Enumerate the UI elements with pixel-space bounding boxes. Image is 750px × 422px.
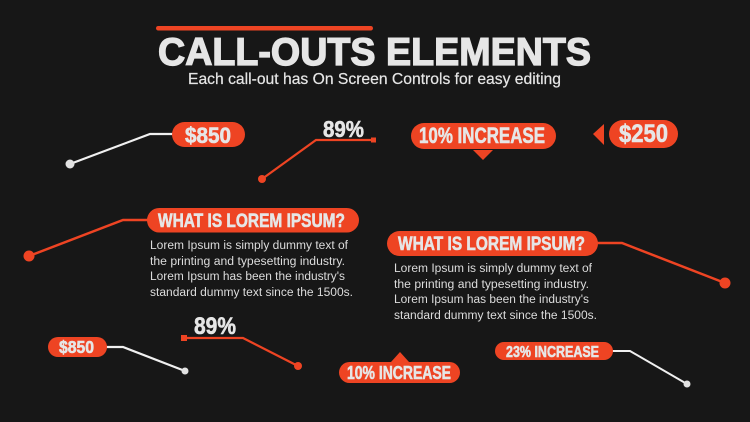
callout: $250 (593, 120, 678, 148)
callout: 23% increase: 23% INCREASE (506, 344, 599, 361)
panel: lorem ipsum left: Lorem Ipsum has been the industry's (150, 271, 345, 283)
panel: lorem ipsum right: standard dummy text since the 1500s. (394, 310, 597, 322)
panel: lorem ipsum right: Lorem Ipsum is simply dummy text of (394, 263, 593, 275)
callout: 89% top: 89% (323, 116, 364, 142)
panel: lorem ipsum right: Lorem Ipsum has been the industry's (394, 294, 589, 306)
callout: 89% bottom (181, 313, 302, 370)
panel: lorem ipsum right: WHAT IS LOREM IPSUM? (398, 234, 585, 255)
panel: lorem ipsum right (387, 231, 730, 322)
callout: 10% increase bottom: 10% INCREASE (347, 363, 451, 383)
panel: lorem ipsum left: WHAT IS LOREM IPSUM? (158, 211, 345, 232)
panel: lorem ipsum left: standard dummy text since the 1500s. (150, 287, 353, 299)
panel: lorem ipsum right: the printing and typesetting industry. (394, 279, 589, 291)
title: CALL-OUTS ELEMENTS (158, 31, 591, 74)
subtitle: Each call-out has On Screen Controls for easy editing (188, 71, 561, 88)
panel: lorem ipsum left: Lorem Ipsum is simply dummy text of (150, 240, 349, 252)
callout: $850 top (66, 122, 245, 168)
panel: lorem ipsum left (24, 208, 359, 299)
panel: lorem ipsum left: the printing and typesetting industry. (150, 256, 345, 268)
callout: 10% increase bottom (339, 352, 460, 383)
callout: $850 top: $850 (185, 123, 231, 148)
callout: 10% increase top (411, 123, 556, 160)
callout: $850 bottom: $850 (59, 337, 94, 357)
callout: 23% increase (495, 342, 690, 388)
callout: 89% bottom: 89% (194, 313, 236, 340)
callout: 10% increase top: 10% INCREASE (419, 123, 545, 148)
title accent bar (156, 26, 373, 30)
callout: $850 bottom (48, 337, 188, 374)
callout: 89% top (258, 116, 376, 183)
callout: $250: $250 (619, 120, 668, 148)
